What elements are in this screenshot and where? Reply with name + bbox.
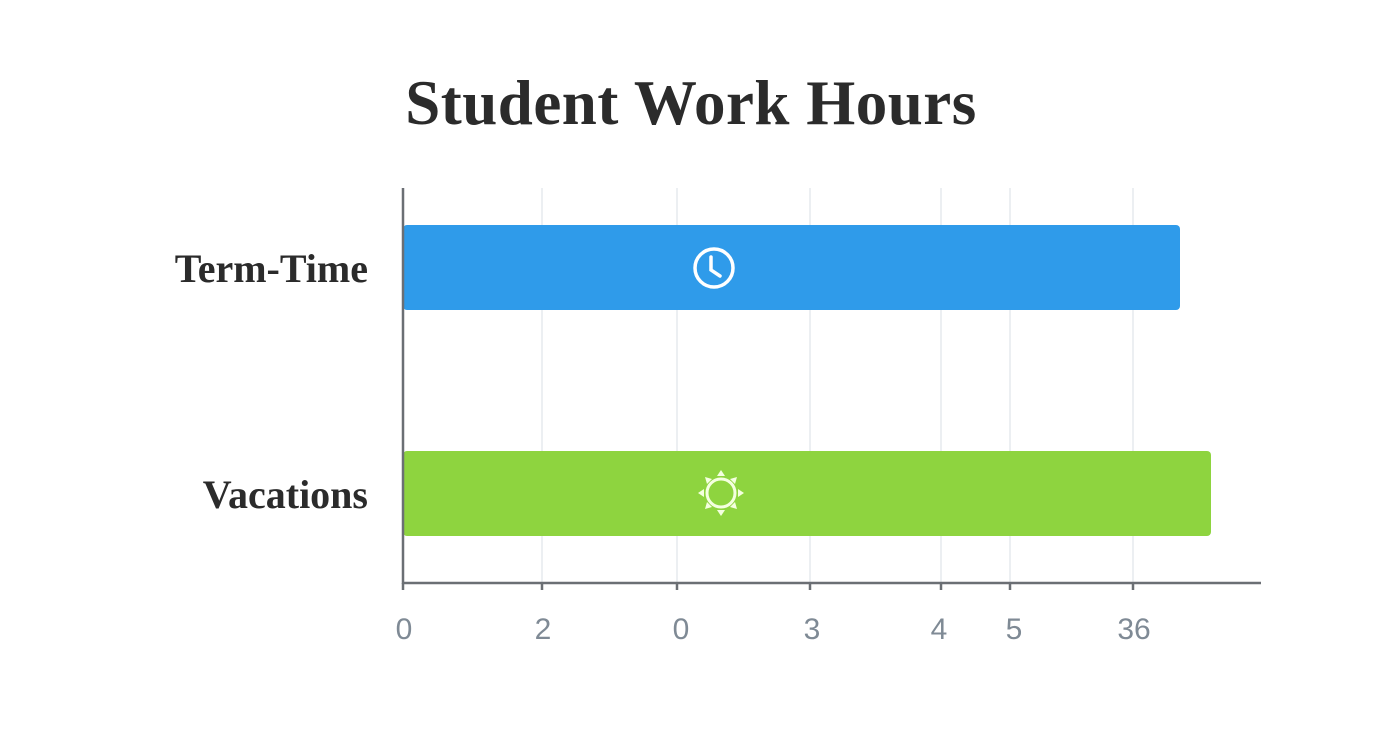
axis tick labels: 2 <box>535 613 551 646</box>
axis tick labels: 5 <box>1006 613 1022 646</box>
axis tick labels: 4 <box>931 613 947 646</box>
axis tick labels: 36 <box>1117 613 1151 646</box>
bar: vacations <box>403 451 1211 536</box>
icon: clock <box>695 249 733 287</box>
category labels <box>175 246 368 517</box>
title: Student Work Hours <box>405 68 977 138</box>
icon: sun <box>698 470 744 516</box>
axis tick labels: 3 <box>804 613 820 646</box>
bar: term-time <box>403 225 1180 310</box>
axes <box>402 188 1261 590</box>
axis tick labels: 0 <box>673 613 689 646</box>
category labels: Vacations <box>203 472 368 517</box>
axis tick labels <box>396 613 1151 646</box>
category labels: Term-Time <box>175 246 368 291</box>
axis tick labels: 0 <box>396 613 412 646</box>
